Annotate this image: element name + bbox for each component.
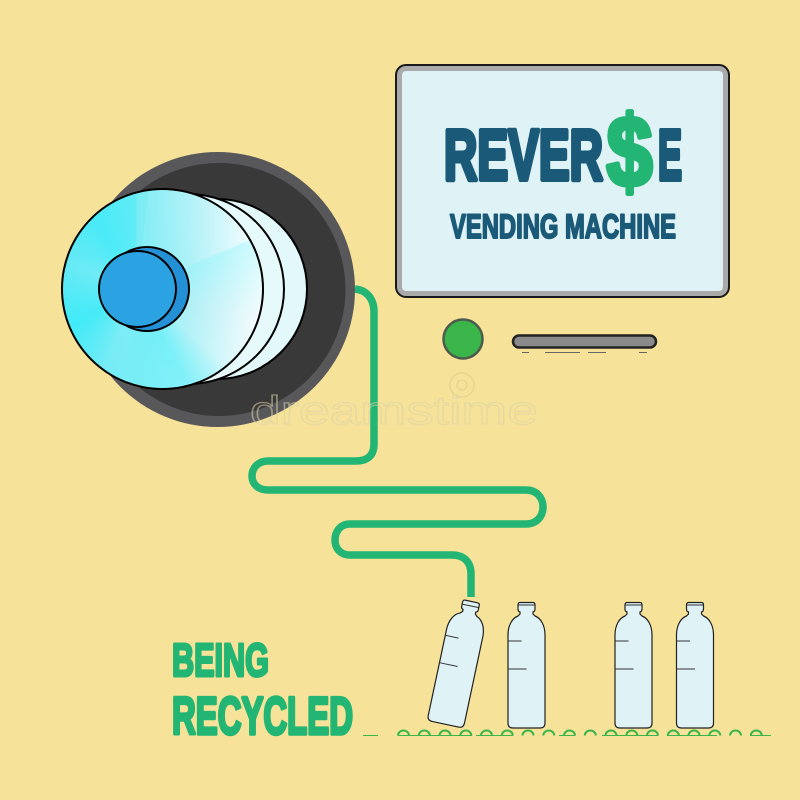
word: recycled: RECYCLED (172, 687, 353, 746)
screen display surface (402, 71, 723, 291)
word: being: BEING (172, 634, 269, 686)
upright bottle 1 (508, 602, 545, 728)
subtitle: vending machine: VENDING MACHINE (450, 208, 676, 246)
green dollar sign: $ (606, 96, 652, 208)
bottle base disc (61, 188, 264, 390)
tilted bottle (427, 598, 489, 728)
word: REVER: REVER (444, 116, 603, 196)
watermark: dreamstime (250, 389, 538, 433)
machine screen (395, 64, 730, 298)
bottle neck and cap (98, 246, 190, 332)
bottle drum with inserted bottle (61, 152, 355, 427)
word: E: E (658, 116, 682, 196)
upright bottle 2 (615, 602, 652, 728)
drum opening and rear bottle rings (110, 152, 355, 427)
upright bottle 3 (676, 602, 714, 728)
